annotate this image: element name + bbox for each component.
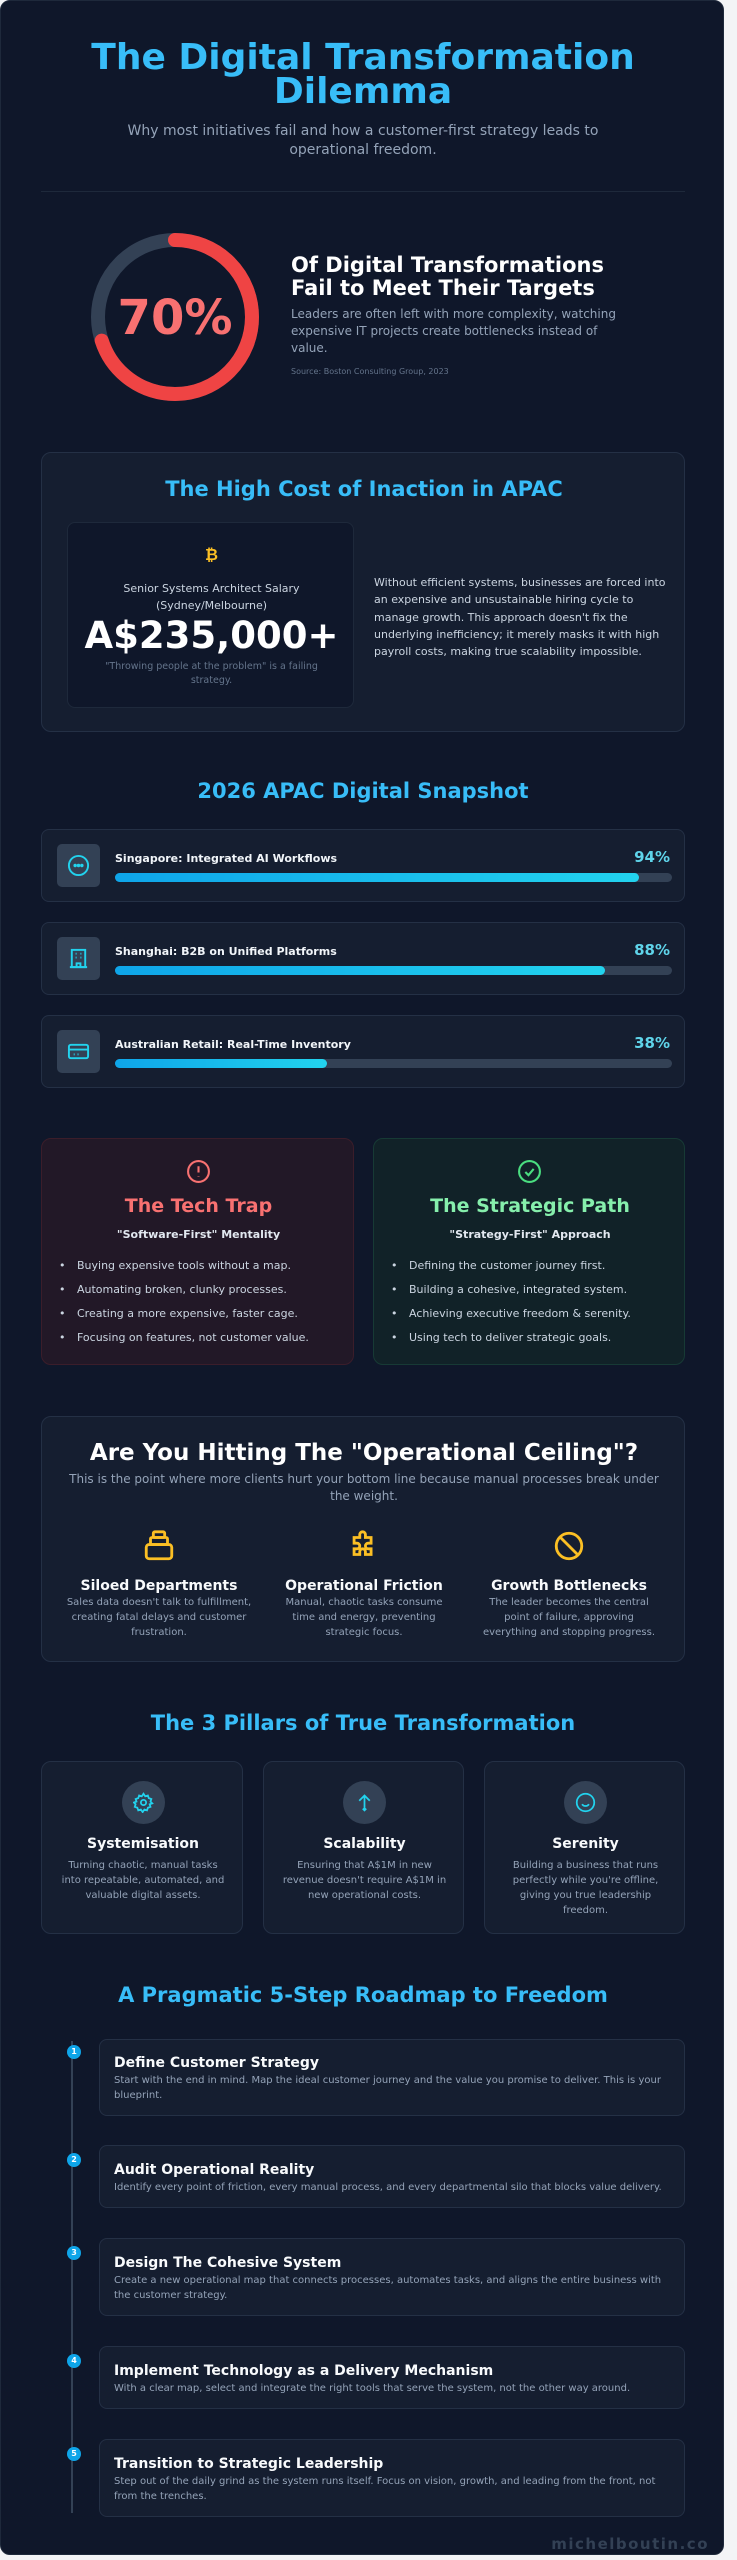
step 4: Implement Technology as a Delivery Mechanism bbox=[114, 2363, 493, 2379]
panel: strategic path: "Strategy-First" Approach bbox=[449, 1228, 611, 1241]
item: siloed departments: Siloed Departments bbox=[81, 1578, 237, 1594]
item: growth bottlenecks bbox=[483, 1532, 655, 1638]
salary card: "Throwing people at the problem" is a failing strategy. bbox=[105, 661, 318, 686]
step 5: Transition to Strategic Leadership bbox=[114, 2456, 383, 2472]
explanation text: Without efficient systems, businesses are forced into an expensive and unsustainable hiring cycle to manage growth. This approach doesn't fix the underlying inefficiency; it merely masks it with high payroll costs, making true scalability impossible. bbox=[374, 576, 666, 658]
heading: Are You Hitting The "Operational Ceiling"? bbox=[90, 1440, 638, 1466]
step 2 bbox=[67, 2145, 685, 2208]
pillar: serenity: Building a business that runs perfectly while you're offline, giving you true leadership freedom. bbox=[513, 1860, 658, 1916]
icon: alert bbox=[187, 1160, 210, 1183]
panel: high cost of inaction bbox=[41, 452, 685, 732]
stat text: Leaders are often left with more complexity, watching expensive IT projects create bottlenecks instead of value. bbox=[291, 307, 616, 355]
panel: tech trap: Creating a more expensive, faster cage. bbox=[77, 1307, 298, 1320]
pillar: systemisation: Systemisation bbox=[87, 1836, 199, 1852]
pillar: systemisation bbox=[41, 1761, 243, 1934]
panel: tech trap bbox=[41, 1138, 354, 1365]
bar: Australian Retail bbox=[41, 1015, 685, 1088]
panel: tech trap: Focusing on features, not customer value. bbox=[77, 1331, 309, 1344]
pillar: serenity bbox=[484, 1761, 685, 1934]
heading: pillars: The 3 Pillars of True Transformation bbox=[151, 1711, 575, 1735]
pillar: scalability: Scalability bbox=[323, 1836, 406, 1852]
stat text bbox=[291, 253, 616, 376]
step 1: 1 bbox=[71, 2047, 77, 2056]
icon: check bbox=[518, 1160, 541, 1183]
timeline bbox=[71, 2041, 73, 2513]
heading: The High Cost of Inaction in APAC bbox=[165, 477, 563, 501]
panel: tech trap: The Tech Trap bbox=[125, 1195, 272, 1217]
title: Dilemma bbox=[274, 71, 452, 112]
subtitle: Why most initiatives fail and how a customer-first strategy leads to operational freedom. bbox=[128, 123, 598, 158]
salary card bbox=[67, 522, 354, 708]
step 2: 2 bbox=[71, 2155, 77, 2164]
step 3: 3 bbox=[71, 2248, 77, 2257]
step 5 bbox=[67, 2439, 685, 2517]
bar: Singapore: 94% bbox=[634, 848, 670, 866]
panel: operational ceiling bbox=[41, 1416, 685, 1662]
item: operational friction: Manual, chaotic tasks consume time and energy, preventing strategic focus. bbox=[286, 1597, 442, 1638]
pillar: serenity: Serenity bbox=[552, 1836, 619, 1852]
pillar: scalability: Ensuring that A$1M in new revenue doesn't require A$1M in new operational costs. bbox=[283, 1860, 446, 1901]
step 3: Design The Cohesive System bbox=[114, 2255, 341, 2271]
panel: tech trap: Automating broken, clunky processes. bbox=[77, 1283, 287, 1296]
step 4: With a clear map, select and integrate the right tools that serve the system, not the other way around. bbox=[114, 2383, 630, 2394]
stat text: Of Digital Transformations Fail to Meet Their Targets bbox=[291, 253, 604, 300]
bar: Australian Retail: Australian Retail: Real-Time Inventory bbox=[115, 1038, 351, 1051]
title bbox=[91, 37, 635, 112]
panel: strategic path: Using tech to deliver strategic goals. bbox=[409, 1331, 611, 1344]
salary card: Senior Systems Architect Salary bbox=[123, 582, 300, 595]
panel: strategic path: The Strategic Path bbox=[430, 1195, 630, 1217]
step 3 bbox=[67, 2238, 685, 2316]
bar: Australian Retail: 38% bbox=[634, 1034, 670, 1052]
panel: tech trap: Buying expensive tools without a map. bbox=[77, 1259, 291, 1272]
item: operational friction: Operational Friction bbox=[285, 1578, 443, 1594]
item: operational friction bbox=[285, 1530, 443, 1638]
stat text: Source: Boston Consulting Group, 2023 bbox=[291, 367, 449, 376]
step 1: Define Customer Strategy bbox=[114, 2055, 319, 2071]
item: siloed departments bbox=[67, 1530, 251, 1638]
step 2: Audit Operational Reality bbox=[114, 2162, 314, 2178]
item: growth bottlenecks: The leader becomes the central point of failure, approving everything and stopping progress. bbox=[483, 1597, 655, 1638]
step 2: Identify every point of friction, every manual process, and every departmental silo that blocks value delivery. bbox=[114, 2182, 662, 2193]
donut chart: 70%: 70% bbox=[118, 290, 232, 346]
heading: snapshot: 2026 APAC Digital Snapshot bbox=[197, 779, 529, 803]
title: The Digital Transformation bbox=[91, 37, 635, 78]
step 1 bbox=[67, 2039, 685, 2116]
pillar: systemisation: Turning chaotic, manual tasks into repeatable, automated, and valuable digital assets. bbox=[62, 1860, 224, 1901]
heading: roadmap: A Pragmatic 5-Step Roadmap to Freedom bbox=[118, 1983, 608, 2007]
panel: strategic path: Defining the customer journey first. bbox=[409, 1259, 605, 1272]
panel: strategic path: Building a cohesive, integrated system. bbox=[409, 1283, 627, 1296]
panel: tech trap: "Software-First" Mentality bbox=[117, 1228, 280, 1241]
bar: Singapore bbox=[41, 829, 685, 902]
donut chart: 70% bbox=[91, 233, 259, 401]
panel: strategic path bbox=[373, 1138, 685, 1365]
panel: strategic path: Achieving executive freedom & serenity. bbox=[409, 1307, 631, 1320]
step 4 bbox=[67, 2346, 685, 2409]
icon: coin: ₿ bbox=[205, 545, 218, 564]
panel: operational ceiling: This is the point where more clients hurt your bottom line because manual processes break under the weight. bbox=[69, 1472, 659, 1503]
bar: Shanghai: Shanghai: B2B on Unified Platforms bbox=[115, 945, 337, 958]
footer brand: michelboutin.co bbox=[551, 2535, 709, 2553]
item: siloed departments: Sales data doesn't talk to fulfillment, creating fatal delays and customer frustration. bbox=[67, 1597, 251, 1638]
item: growth bottlenecks: Growth Bottlenecks bbox=[491, 1578, 647, 1594]
step 5: 5 bbox=[71, 2449, 77, 2458]
step 3: Create a new operational map that connects processes, automates tasks, and aligns the entire business with the customer strategy. bbox=[114, 2275, 661, 2301]
step 1: Start with the end in mind. Map the ideal customer journey and the value you promise to deliver. This is your blueprint. bbox=[114, 2075, 661, 2101]
bar: Singapore: Singapore: Integrated AI Workflows bbox=[115, 852, 337, 865]
bar: Shanghai bbox=[41, 922, 685, 995]
step 5: Step out of the daily grind as the system runs itself. Focus on vision, growth, and leading from the front, not from the trenches. bbox=[114, 2476, 655, 2502]
bar: Shanghai: 88% bbox=[634, 941, 670, 959]
step 4: 4 bbox=[71, 2356, 77, 2365]
salary card: (Sydney/Melbourne) bbox=[156, 599, 267, 612]
salary card: A$235,000+ bbox=[85, 614, 338, 657]
pillar: scalability bbox=[263, 1761, 464, 1934]
